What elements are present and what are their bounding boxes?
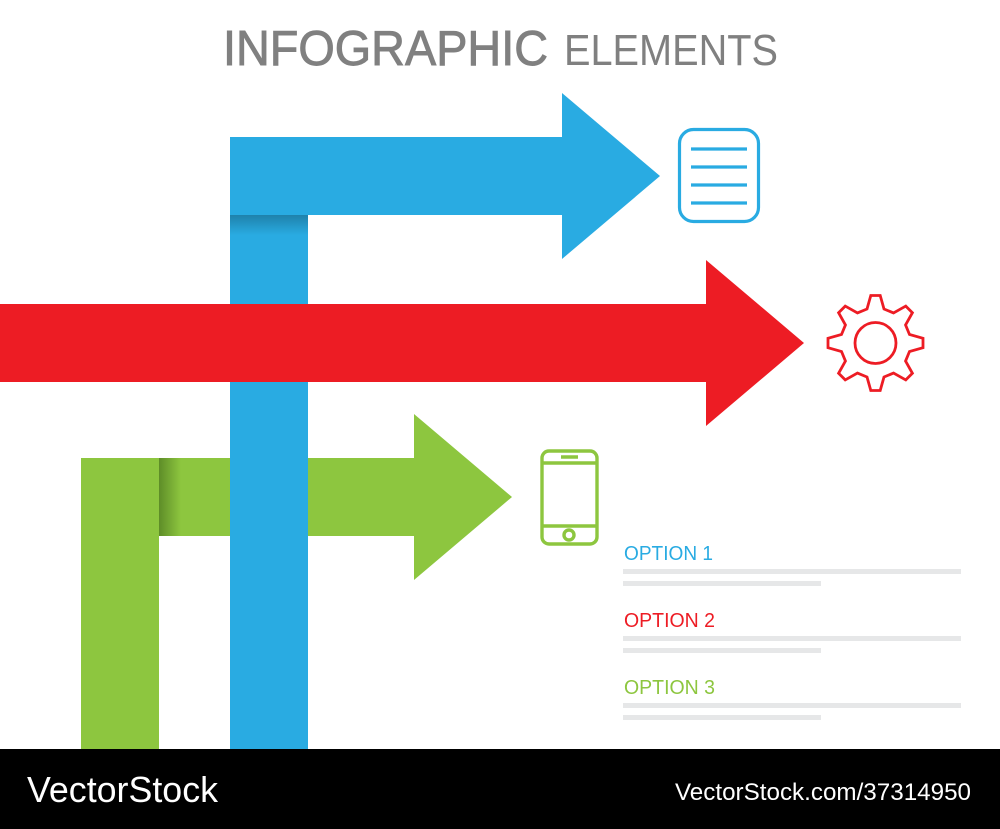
blue arrow	[230, 93, 660, 749]
option 3	[623, 677, 961, 720]
icon: smartphone	[542, 451, 597, 544]
title: ELEMENTS	[564, 26, 778, 75]
option 1	[623, 543, 961, 586]
footer bar: VectorStock.com/37314950	[675, 779, 971, 806]
option 1: OPTION 1	[624, 543, 713, 565]
icon: document	[680, 130, 758, 222]
option 2: OPTION 2	[624, 610, 715, 632]
red arrow	[0, 260, 804, 426]
green arrow	[81, 414, 512, 749]
footer bar: VectorStock	[27, 769, 219, 810]
icon: gear	[828, 296, 923, 390]
option 2	[623, 610, 961, 653]
footer bar	[0, 749, 1000, 829]
title	[223, 22, 778, 76]
title: INFOGRAPHIC	[223, 22, 548, 76]
option 3: OPTION 3	[624, 677, 715, 699]
